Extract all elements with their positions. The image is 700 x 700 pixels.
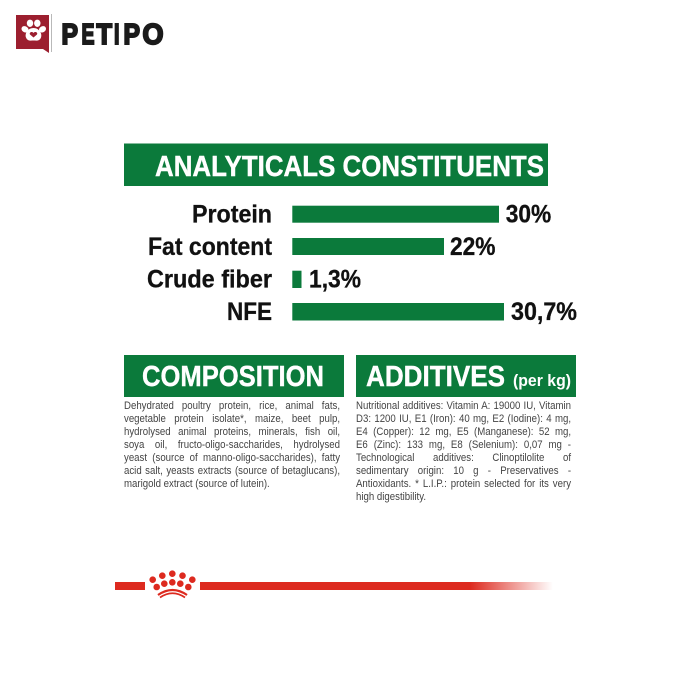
text block: composition: vegetable protein isolate*, maize, beet pulp, [124,413,340,425]
heading: per kg: (per kg) [513,371,571,390]
row: crude fiber: Crude fiber [147,266,272,294]
text block: additives: E4 (Copper): 12 mg, E5 (Manganese): 52 mg, [356,426,571,438]
icon: royal canin crown [149,570,196,598]
heading: analyticals constituents: ANALYTICALS CONSTITUENTS [155,151,544,183]
logo wordmark: I [114,19,120,51]
text block: additives [356,400,572,503]
row: fat content [148,233,496,261]
text block: additives: high digestibility. [356,491,426,503]
text block: composition: hydrolysed animal proteins, minerals, fish oil, [124,426,340,438]
row: protein [192,201,551,229]
heading: additives: ADDITIVES [366,361,505,393]
text block: additives: D3: 1200 IU, E1 (Iron): 40 mg, E2 (Iodine): 4 mg, [356,413,571,425]
heading: composition: COMPOSITION [142,361,324,393]
panel: analyticals constituents header [124,144,548,186]
row: crude fiber: 1,3% [309,266,361,294]
logo wordmark: T [96,19,112,51]
logo wordmark: O [142,19,164,51]
row: NFE [227,298,577,326]
row: crude fiber [147,266,361,294]
row: protein: 30% [506,201,551,229]
logo: Petipo [16,14,164,53]
brand line: right fading segment [200,582,553,590]
row: NFE: NFE [227,298,272,326]
row: fat content: 22% [450,233,496,261]
text block: additives: sedimentary origin: 10 g - Preservatives - [356,465,571,477]
brand line: left segment [115,582,145,590]
logo wordmark: P [124,19,140,51]
row: fat content: Fat content [148,233,273,261]
logo wordmark [62,19,164,51]
logo wordmark: P [62,19,78,51]
panel: composition header [124,355,344,397]
text block: additives: E6 (Zinc): 133 mg, E8 (Selenium): 0,07 mg - [356,439,571,451]
row: protein: Protein [192,201,272,229]
text block: composition [124,400,340,490]
text block: composition: marigold extract (source of lutein). [124,478,270,490]
text block: additives: Antioxidants. * L.I.P.: protein selected for its very [356,478,571,490]
text block: composition: Dehydrated poultry protein, rice, animal fats, [124,400,340,412]
logo wordmark: E [82,19,94,51]
bar chart: constituents [147,201,577,326]
panel: additives header [356,355,576,397]
text block: composition: acid salt, yeasts extracts (source of betaglucans), [124,465,340,477]
text block: composition: soya oil, fructo-oligo-saccharides, hydrolysed [124,439,340,451]
icon: paw speech bubble [16,14,52,53]
text block: additives: Nutritional additives: Vitamin A: 19000 IU, Vitamin [356,400,571,412]
row: NFE: 30,7% [511,298,577,326]
text block: composition: yeast (source of manno-oligo-saccharides), fatty [124,452,340,464]
text block: additives: Technological additives: Clinoptilolite of [356,452,571,464]
